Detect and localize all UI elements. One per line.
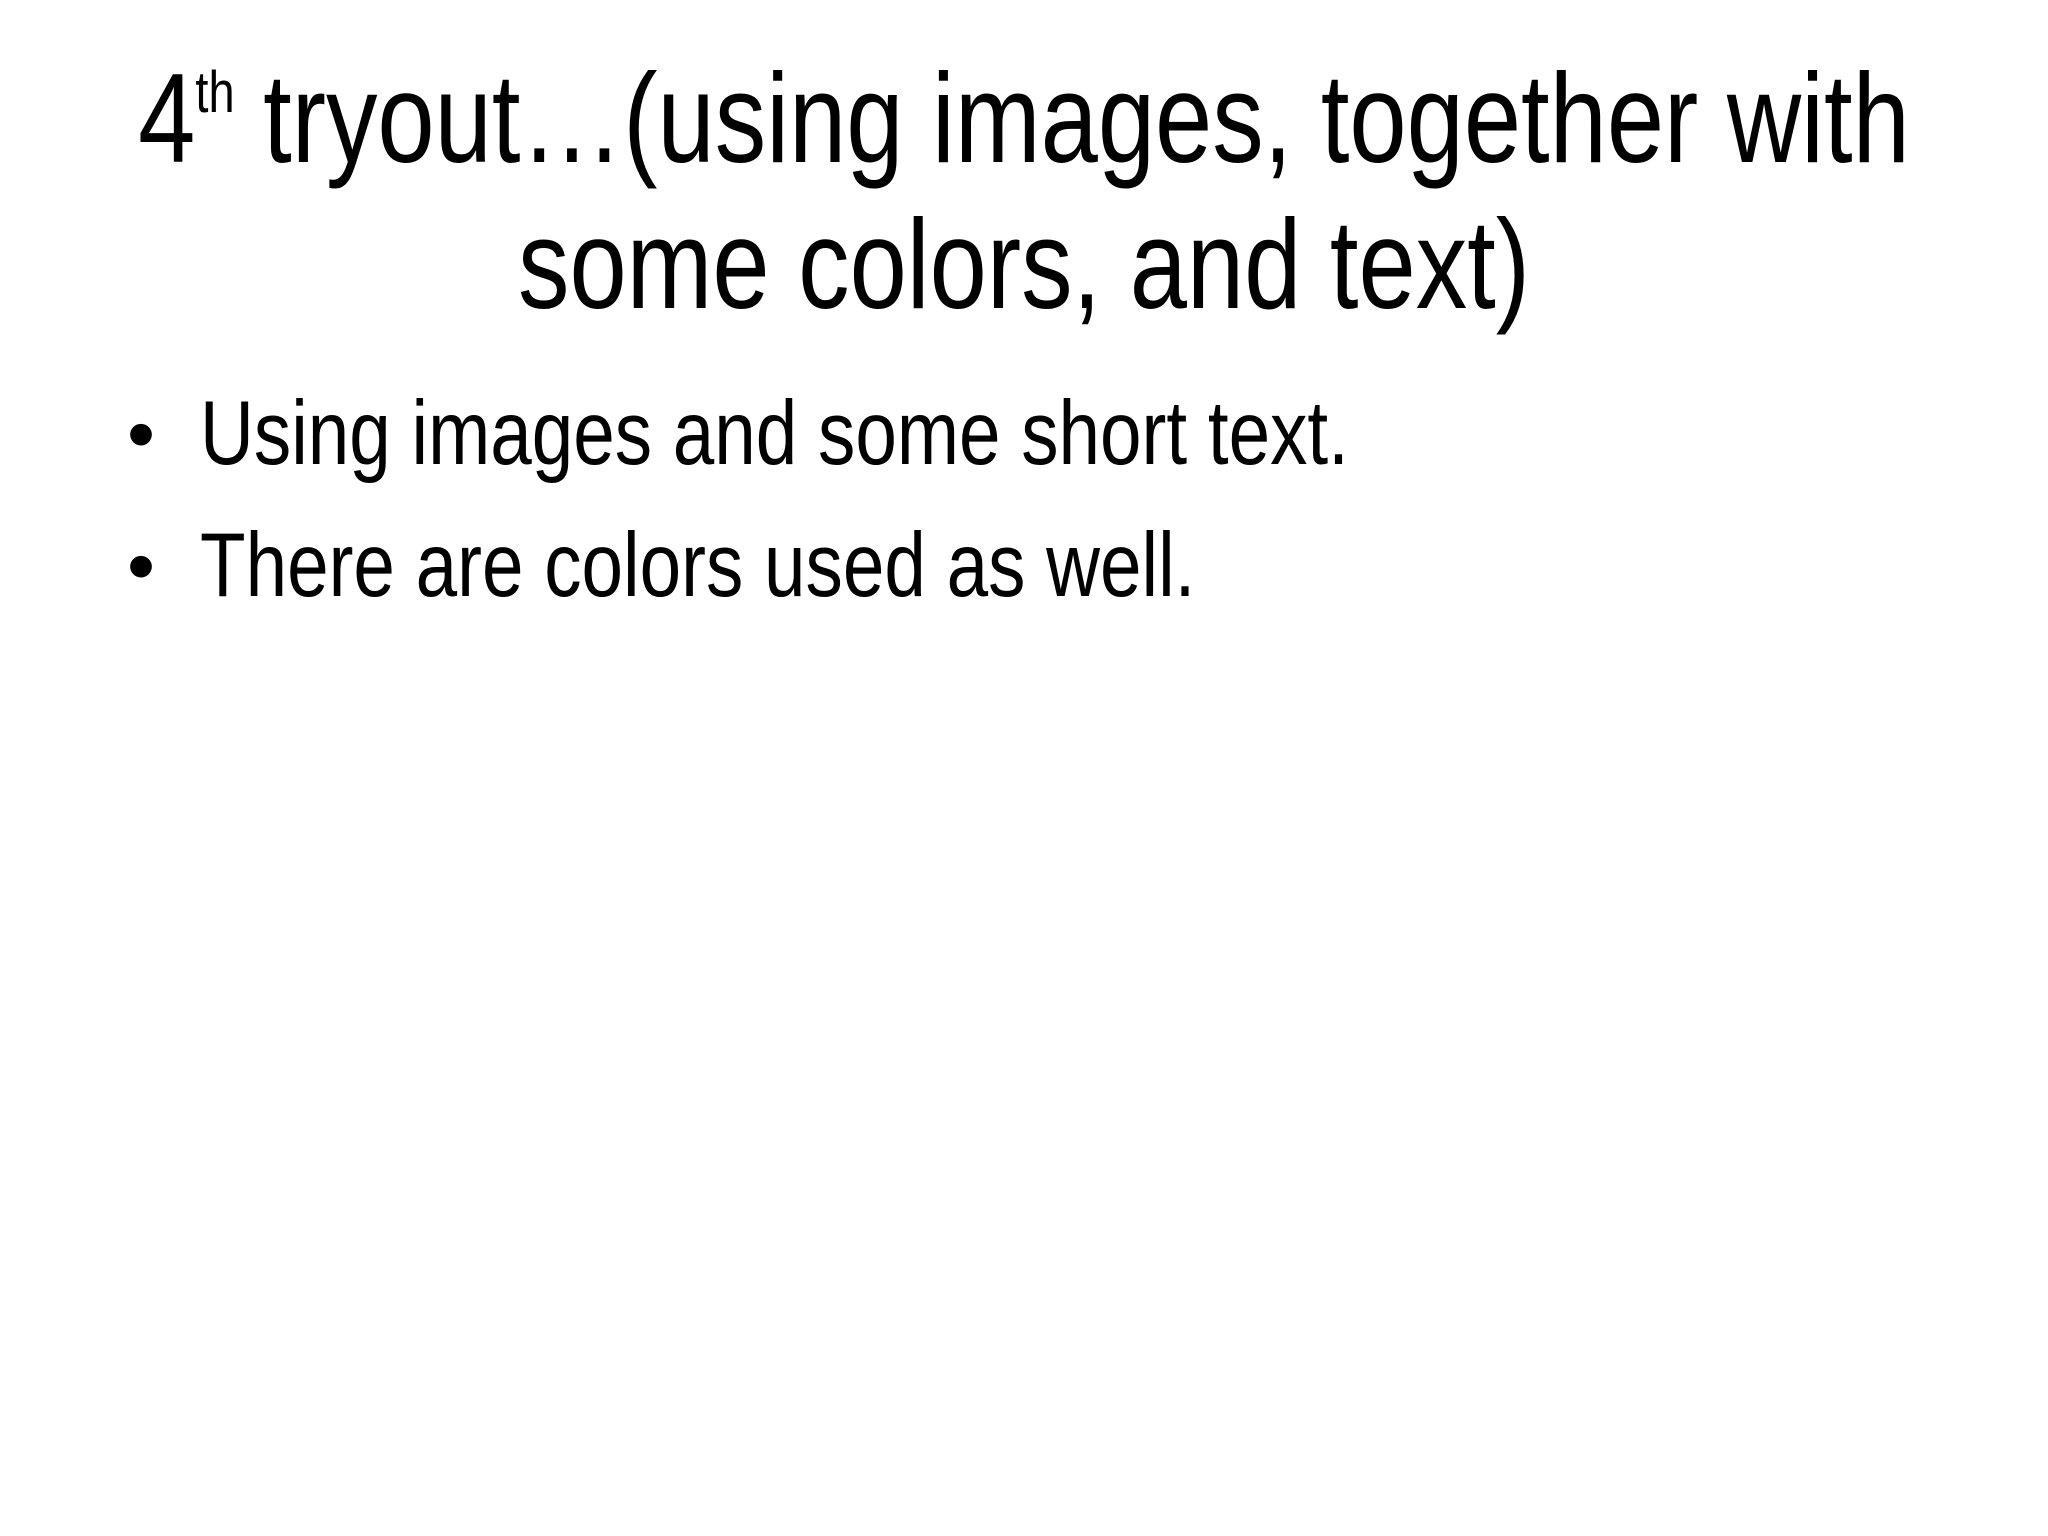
bullet: colors: There are colors used as well.	[200, 515, 1195, 616]
bullet: images and text: Using images and some short text.	[200, 383, 1349, 484]
title: some colors, and text)	[518, 193, 1530, 335]
title: 4th tryout…(using images, together with	[138, 47, 1910, 189]
bullet: colors: •	[127, 521, 155, 610]
bullet: images and text: •	[127, 389, 155, 478]
title	[138, 47, 1910, 335]
bullet list	[127, 383, 1349, 616]
